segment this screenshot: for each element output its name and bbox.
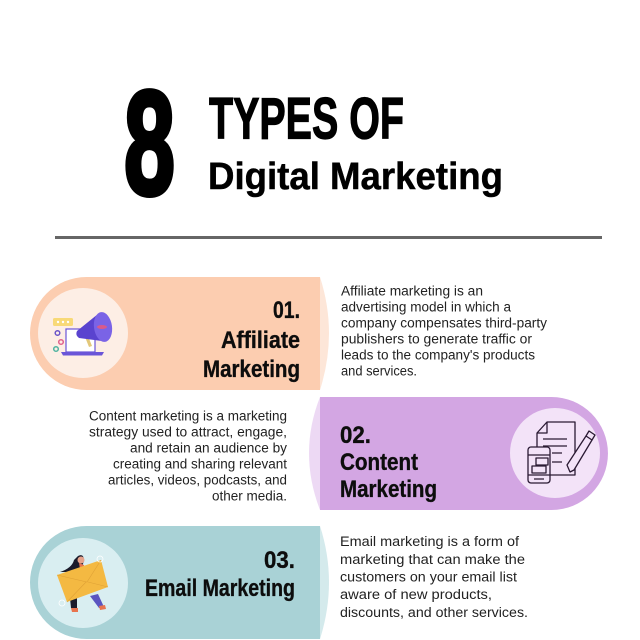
text block: content description: strategy used to attract, engage, [89,424,287,440]
text block: affiliate description: Affiliate marketing is an [341,284,483,298]
panel: affiliate marketing [30,277,329,390]
icon: person carrying envelope [57,555,108,612]
text block: email description [340,534,528,620]
title: TYPES OF: TYPES OF [209,86,404,152]
text block: email description: Email marketing is a form of [340,534,519,549]
text block: content description [89,408,287,504]
text block: affiliate description: advertising model in which a [341,300,511,314]
text block: email description: marketing that can make the [340,552,525,567]
text block: content description: articles, videos, podcasts, and [108,472,287,488]
text block: email description: aware of new products, [340,587,492,602]
text block: affiliate description: leads to the company's products [341,348,535,362]
heading: 02. Content Marketing: 02. [340,422,371,449]
text block: content description: and retain an audience by [130,440,287,456]
big numeral 8: 8 [124,61,175,226]
heading: 01. Affiliate Marketing [203,297,300,383]
text block: affiliate description: and services. [341,364,417,378]
icon: document, phone and pen [528,422,595,483]
text block: content description: other media. [212,488,287,504]
text block: email description: discounts, and other services. [340,605,528,620]
heading: 01. Affiliate Marketing: Marketing [203,356,300,383]
panel: email marketing [30,526,329,639]
heading: 02. Content Marketing [340,422,437,503]
heading: 02. Content Marketing: Content [340,449,418,476]
text block: email description: customers on your email list [340,570,517,584]
text block: content description: creating and sharing relevant [113,456,287,472]
heading: 01. Affiliate Marketing: Affiliate [221,327,300,354]
panel: content marketing [309,397,608,510]
text block: content description: Content marketing is a marketing [89,408,287,424]
heading: 03. Email Marketing: 03. [264,547,295,574]
text block: affiliate description: publishers to generate traffic or [341,332,533,346]
heading: 02. Content Marketing: Marketing [340,476,437,503]
title: Digital Marketing: Digital Marketing [208,156,503,198]
heading: 03. Email Marketing: Email Marketing [145,575,295,602]
heading: 03. Email Marketing [145,547,295,602]
icon: megaphone and laptop [53,311,114,356]
heading: 01. Affiliate Marketing: 01. [273,297,300,324]
text block: affiliate description: company compensates third-party [341,316,547,330]
text block: affiliate description [341,284,547,378]
